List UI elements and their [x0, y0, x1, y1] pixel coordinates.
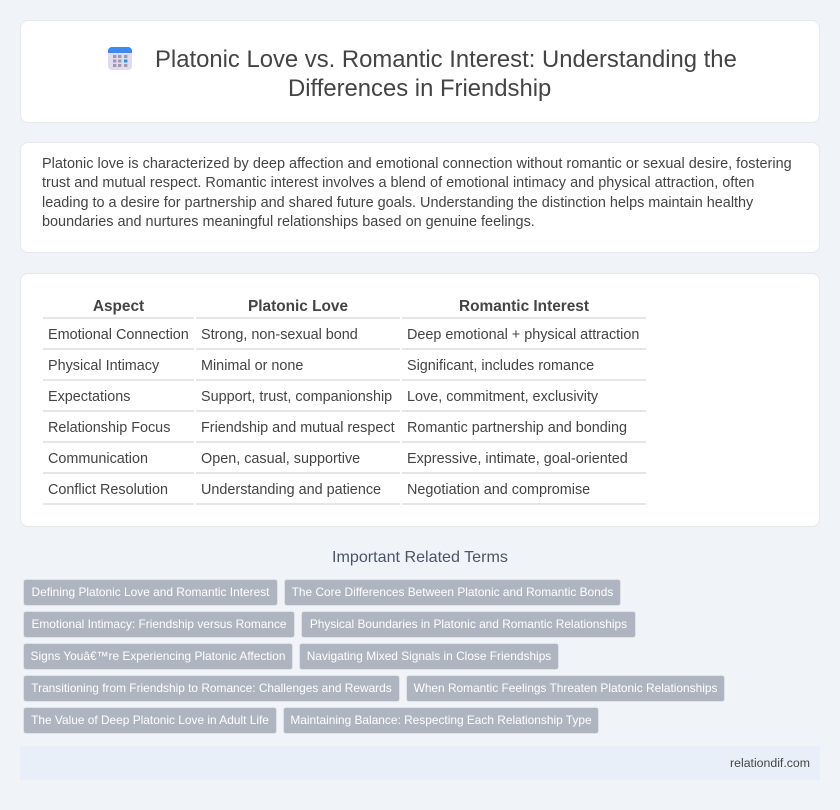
table header: Platonic Love	[248, 298, 348, 315]
comparison table: Love, commitment, exclusivity	[407, 389, 598, 405]
description text	[42, 156, 792, 230]
comparison table: Communication	[48, 451, 148, 467]
title: Differences in Friendship	[288, 75, 551, 102]
related terms tags: Defining Platonic Love and Romantic Interest	[32, 585, 269, 599]
related terms tags: Signs Youâ€™re Experiencing Platonic Affection	[31, 649, 285, 663]
comparison table: Open, casual, supportive	[201, 451, 360, 467]
related terms tags: When Romantic Feelings Threaten Platonic Relationships	[414, 681, 717, 695]
related terms tags: Emotional Intimacy: Friendship versus Romance	[31, 617, 287, 631]
related terms tags: Transitioning from Friendship to Romance: Challenges and Rewards	[31, 681, 392, 695]
comparison table: Conflict Resolution	[48, 482, 168, 498]
related terms tags: Maintaining Balance: Respecting Each Relationship Type	[290, 713, 592, 727]
description text: boundaries and nurtures meaningful relationships based on genuine feelings.	[42, 214, 535, 230]
footer bar	[20, 746, 820, 780]
description text: trust and mutual respect. Romantic interest involves a blend of emotional intimacy and physical attraction, often	[42, 175, 754, 191]
related terms tags: The Core Differences Between Platonic and Romantic Bonds	[292, 585, 613, 599]
comparison table: Negotiation and compromise	[407, 482, 590, 498]
title: Platonic Love vs. Romantic Interest: Understanding the	[155, 46, 737, 73]
related terms tags: Physical Boundaries in Platonic and Romantic Relationships	[310, 617, 627, 631]
related terms tags	[23, 579, 725, 734]
icon: calendar	[108, 47, 132, 70]
comparison table: Significant, includes romance	[407, 358, 594, 374]
related terms tags: Navigating Mixed Signals in Close Friendships	[307, 649, 551, 663]
description text: leading to a desire for partnership and shared future goals. Understanding the distinction helps maintain healthy	[42, 195, 753, 211]
related terms tags: The Value of Deep Platonic Love in Adult Life	[31, 713, 269, 727]
comparison table: Romantic partnership and bonding	[407, 420, 627, 436]
table header	[93, 298, 589, 315]
comparison table: Deep emotional + physical attraction	[407, 327, 639, 343]
comparison table: Understanding and patience	[201, 482, 381, 498]
related terms heading: Important Related Terms	[332, 548, 508, 566]
header panel	[20, 20, 820, 123]
comparison table: Emotional Connection	[48, 327, 189, 343]
comparison table: Support, trust, companionship	[201, 389, 392, 405]
panel: description	[20, 142, 820, 253]
comparison table: Strong, non-sexual bond	[201, 327, 358, 343]
comparison table: Physical Intimacy	[48, 358, 159, 374]
comparison table: Expectations	[48, 389, 130, 405]
comparison table: Friendship and mutual respect	[201, 420, 395, 436]
table header: Romantic Interest	[459, 298, 589, 315]
panel: comparison table	[20, 273, 820, 527]
comparison table: Relationship Focus	[48, 420, 170, 436]
comparison table: Minimal or none	[201, 358, 303, 374]
table header: Aspect	[93, 298, 144, 315]
description text: Platonic love is characterized by deep affection and emotional connection without romantic or sexual desire, fostering	[42, 156, 792, 172]
comparison table: Expressive, intimate, goal-oriented	[407, 451, 628, 467]
comparison table	[43, 298, 646, 505]
footer source text: relationdif.com	[730, 756, 810, 770]
title	[155, 46, 737, 102]
